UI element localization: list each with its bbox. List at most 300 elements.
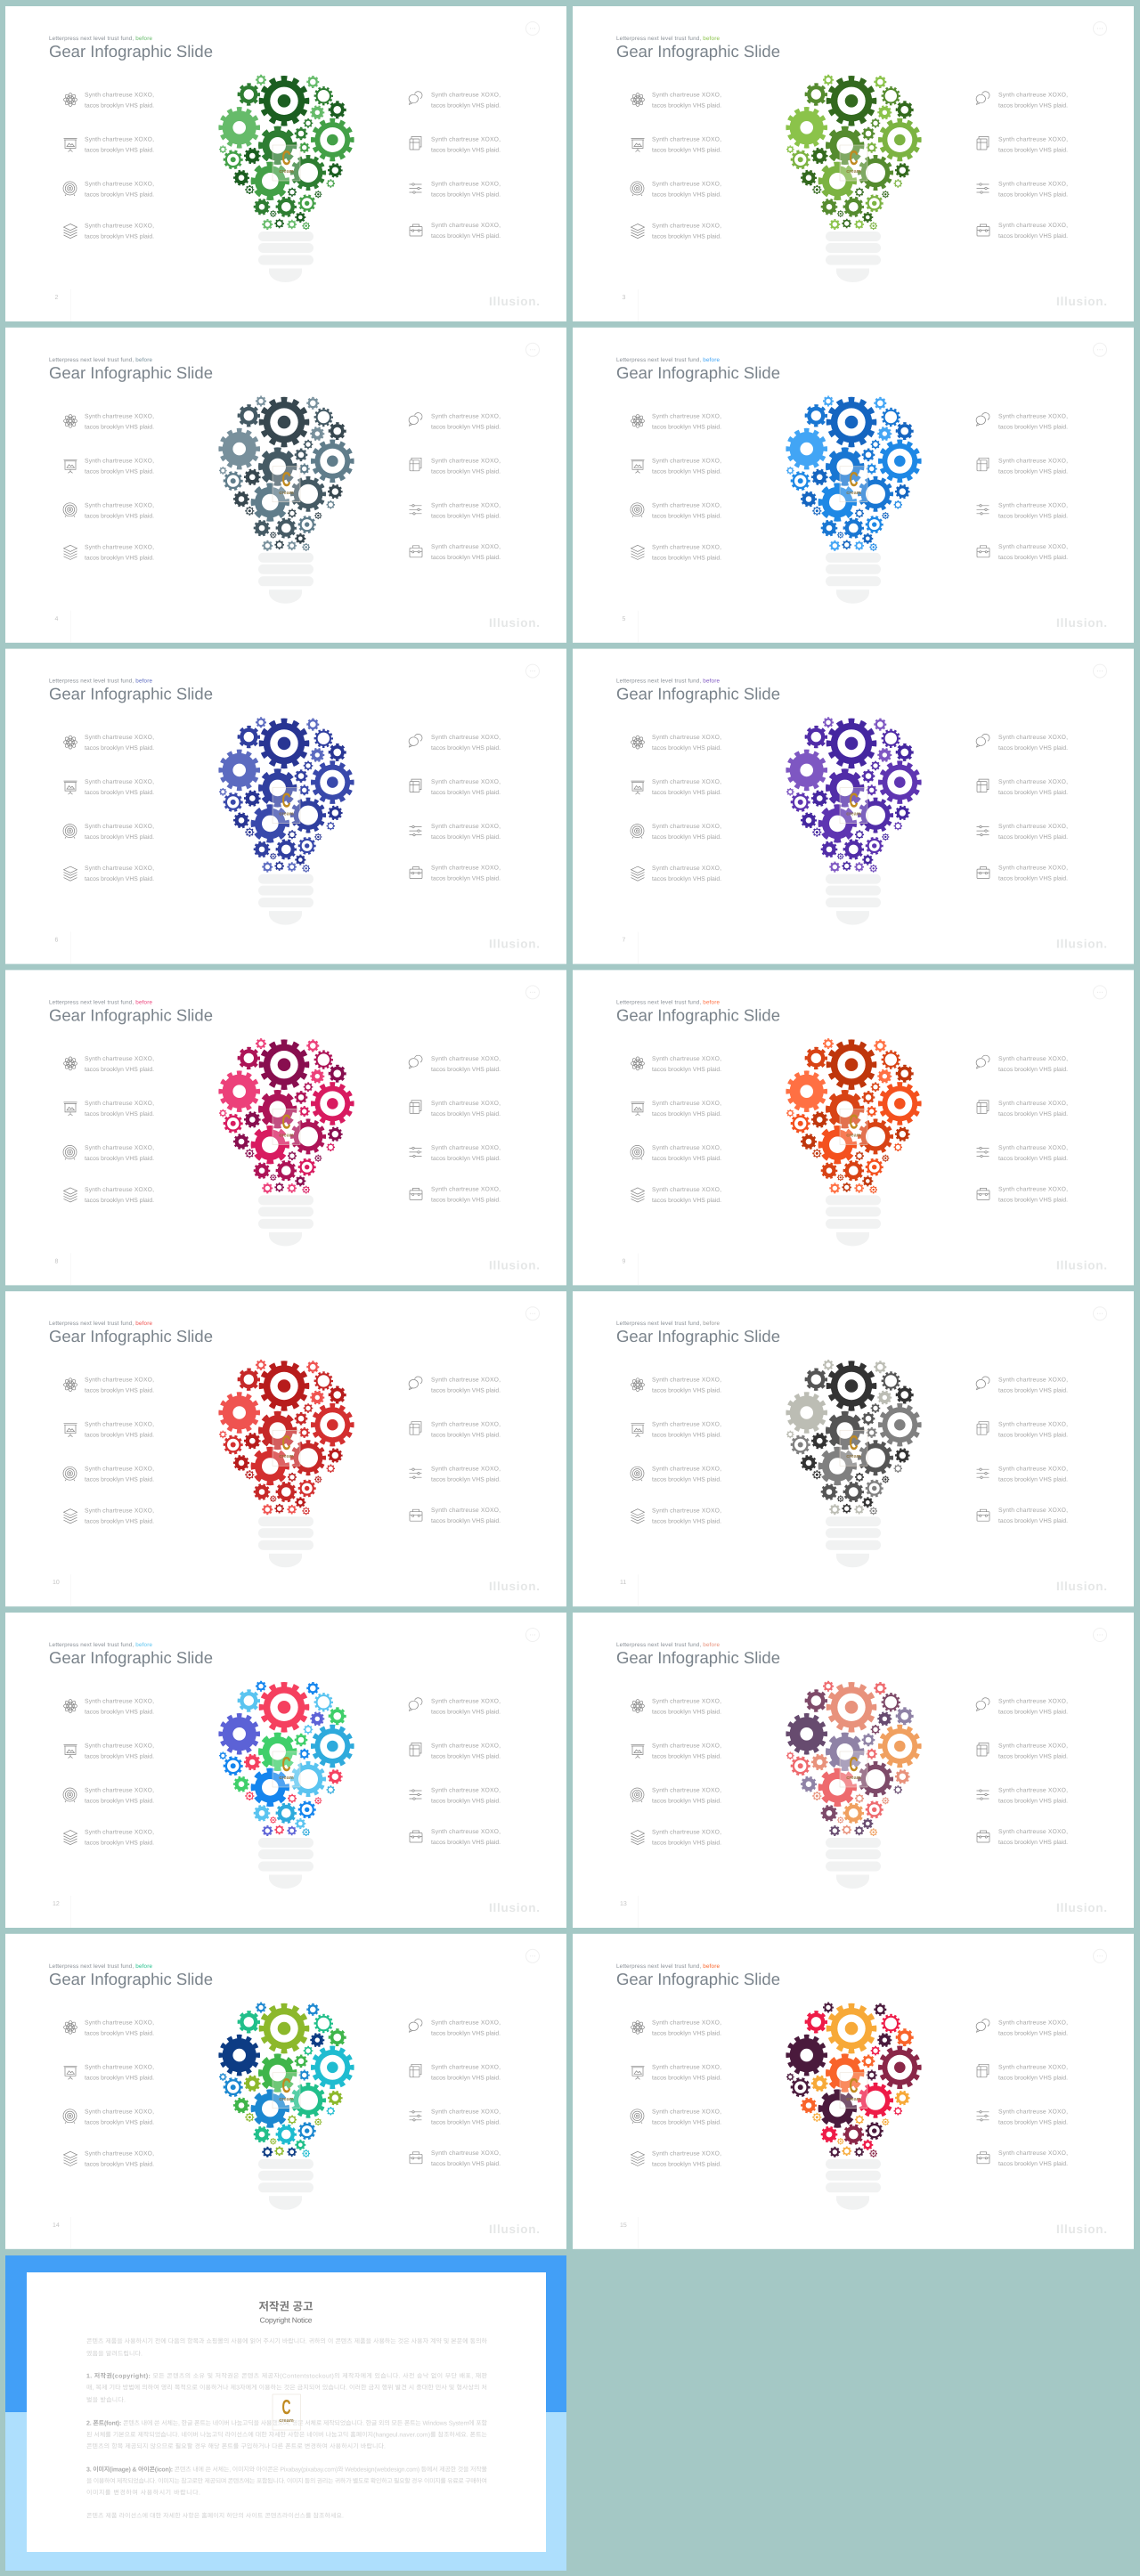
watermark xyxy=(840,1430,867,1466)
item 2: tacos brooklyn VHS plaid. xyxy=(652,1111,721,1117)
item 4: tacos brooklyn VHS plaid. xyxy=(85,2161,154,2167)
watermark: cream xyxy=(846,169,861,175)
item 2 xyxy=(64,779,154,796)
menu icon xyxy=(1094,986,1106,999)
item 6: tacos brooklyn VHS plaid. xyxy=(998,1111,1068,1117)
item 5 xyxy=(976,1377,1068,1394)
item 8: Synth chartreuse XOXO, xyxy=(998,1186,1068,1192)
item 8: Synth chartreuse XOXO, xyxy=(431,544,501,550)
footer divider xyxy=(69,1896,72,1928)
page number: 11 xyxy=(620,1580,626,1586)
item 4: tacos brooklyn VHS plaid. xyxy=(652,1519,721,1525)
item 6: tacos brooklyn VHS plaid. xyxy=(998,148,1068,153)
item 6: tacos brooklyn VHS plaid. xyxy=(431,1433,501,1439)
item 7 xyxy=(410,1467,501,1483)
footer divider xyxy=(637,2217,639,2249)
item 3: tacos brooklyn VHS plaid. xyxy=(85,1799,154,1804)
item 4: tacos brooklyn VHS plaid. xyxy=(85,1198,154,1204)
item 5: tacos brooklyn VHS plaid. xyxy=(431,424,501,430)
item 7: tacos brooklyn VHS plaid. xyxy=(998,834,1068,841)
item 5: tacos brooklyn VHS plaid. xyxy=(998,1710,1068,1715)
item 6: tacos brooklyn VHS plaid. xyxy=(431,790,501,796)
item 3: tacos brooklyn VHS plaid. xyxy=(652,2119,721,2125)
item 1: tacos brooklyn VHS plaid. xyxy=(652,1710,721,1715)
item 1: Synth chartreuse XOXO, xyxy=(652,735,721,741)
item 2: tacos brooklyn VHS plaid. xyxy=(85,1433,154,1439)
item 3 xyxy=(63,182,154,198)
logo: Illusion. xyxy=(1056,1580,1107,1593)
logo: Illusion. xyxy=(489,1580,540,1593)
watermark xyxy=(273,1109,300,1144)
item 5: tacos brooklyn VHS plaid. xyxy=(998,2030,1068,2036)
item 1 xyxy=(64,735,154,752)
watermark: cream xyxy=(846,1454,861,1459)
watermark: cream xyxy=(279,1133,294,1138)
page number: 7 xyxy=(622,938,625,944)
footer divider xyxy=(69,611,72,643)
item 7 xyxy=(976,2109,1068,2125)
item 6: tacos brooklyn VHS plaid. xyxy=(431,1111,501,1117)
paragraph 1: copyright xyxy=(86,2372,488,2404)
item 8 xyxy=(977,1186,1068,1203)
kicker: Letterpress next level trust fund, before xyxy=(49,679,152,685)
item 5 xyxy=(976,1698,1068,1715)
panel: slide 3 lime xyxy=(573,6,1134,321)
item 3 xyxy=(631,2109,721,2125)
item 3: Synth chartreuse XOXO, xyxy=(652,824,721,830)
item 2: Synth chartreuse XOXO, xyxy=(85,1743,154,1749)
item 1: tacos brooklyn VHS plaid. xyxy=(652,745,721,752)
item 8 xyxy=(977,865,1068,882)
item 5 xyxy=(409,413,501,430)
item 3 xyxy=(631,1788,721,1804)
item 4 xyxy=(64,865,154,882)
item 3: tacos brooklyn VHS plaid. xyxy=(652,192,721,198)
item 8: tacos brooklyn VHS plaid. xyxy=(998,1840,1068,1846)
item 4: tacos brooklyn VHS plaid. xyxy=(652,1840,721,1847)
item 6: tacos brooklyn VHS plaid. xyxy=(431,468,501,475)
item 2 xyxy=(631,458,721,475)
paragraph 1: copyright: 벌을 받습니다. xyxy=(86,2397,126,2404)
kicker: Letterpress next level trust fund, before xyxy=(616,1642,720,1648)
logo: Illusion. xyxy=(1056,938,1107,951)
item 7: tacos brooklyn VHS plaid. xyxy=(431,2119,501,2125)
item 2: Synth chartreuse XOXO, xyxy=(85,779,154,785)
item 5 xyxy=(976,413,1068,430)
item 2: Synth chartreuse XOXO, xyxy=(652,137,721,142)
item 1: tacos brooklyn VHS plaid. xyxy=(85,745,154,752)
item 5: Synth chartreuse XOXO, xyxy=(431,413,501,419)
item 1 xyxy=(631,735,721,752)
intro paragraph: 콘텐츠 제품을 사용하시기 전에 다음의 항목과 쇼핑몰의 사용에 읽어 주시기 바랍니다. 귀하의 이 콘텐츠 제품을 사용하는 것은 사용자 계약 및 본문에 동의하 xyxy=(86,2338,488,2345)
item 7: Synth chartreuse XOXO, xyxy=(998,182,1068,187)
item 2 xyxy=(631,1743,721,1759)
item 2: Synth chartreuse XOXO, xyxy=(652,779,721,785)
item 6: tacos brooklyn VHS plaid. xyxy=(998,1433,1068,1439)
item 4: tacos brooklyn VHS plaid. xyxy=(85,1840,154,1847)
item 8 xyxy=(410,2150,501,2167)
item 2: Synth chartreuse XOXO, xyxy=(652,2064,721,2070)
item 4: tacos brooklyn VHS plaid. xyxy=(652,1198,721,1204)
item 4 xyxy=(64,544,154,561)
watermark xyxy=(273,1751,300,1787)
kicker: Letterpress next level trust fund, before xyxy=(616,679,720,685)
item 5 xyxy=(409,92,501,109)
item 7 xyxy=(410,1145,501,1162)
item 5: tacos brooklyn VHS plaid. xyxy=(431,745,501,752)
item 4: Synth chartreuse XOXO, xyxy=(85,1829,154,1836)
watermark: C xyxy=(850,1109,859,1133)
page number: 9 xyxy=(622,1258,625,1264)
watermark xyxy=(273,788,300,824)
logo: Illusion. xyxy=(1056,295,1107,308)
item 2 xyxy=(64,2064,154,2081)
watermark: C xyxy=(281,1752,290,1776)
item 6: Synth chartreuse XOXO, xyxy=(431,1101,501,1107)
item 8: tacos brooklyn VHS plaid. xyxy=(998,1197,1068,1203)
item 3 xyxy=(631,1467,721,1483)
item 1: Synth chartreuse XOXO, xyxy=(85,2019,154,2026)
item 7 xyxy=(976,502,1068,519)
item 4 xyxy=(631,1508,721,1525)
watermark xyxy=(840,788,867,824)
item 8: tacos brooklyn VHS plaid. xyxy=(431,1518,501,1524)
item 7: tacos brooklyn VHS plaid. xyxy=(431,1156,501,1162)
item 7: tacos brooklyn VHS plaid. xyxy=(431,192,501,198)
item 7: Synth chartreuse XOXO, xyxy=(998,824,1068,830)
item 8: tacos brooklyn VHS plaid. xyxy=(431,2161,501,2167)
item 7: tacos brooklyn VHS plaid. xyxy=(998,1156,1068,1162)
item 5: tacos brooklyn VHS plaid. xyxy=(998,103,1068,109)
item 8: Synth chartreuse XOXO, xyxy=(431,865,501,872)
item 3: tacos brooklyn VHS plaid. xyxy=(652,513,721,519)
watermark: C xyxy=(281,1109,290,1133)
item 1 xyxy=(64,413,154,430)
item 2: tacos brooklyn VHS plaid. xyxy=(652,2075,721,2081)
item 1 xyxy=(631,1056,721,1073)
watermark: C xyxy=(850,1431,859,1454)
lightbulb made of gears xyxy=(786,718,919,925)
item 8 xyxy=(977,2150,1068,2167)
item 6 xyxy=(410,137,501,153)
item 2 xyxy=(64,1743,154,1759)
item 6: Synth chartreuse XOXO, xyxy=(431,458,501,464)
item 2 xyxy=(64,1422,154,1439)
item 1 xyxy=(64,1699,154,1715)
footer divider xyxy=(637,932,639,964)
item 7: Synth chartreuse XOXO, xyxy=(431,1145,501,1151)
item 7: Synth chartreuse XOXO, xyxy=(998,502,1068,508)
kicker: Letterpress next level trust fund, before xyxy=(616,357,720,363)
watermark: cream xyxy=(279,1454,294,1459)
watermark: cream xyxy=(846,491,861,496)
logo: Illusion. xyxy=(489,938,540,951)
item 1: tacos brooklyn VHS plaid. xyxy=(85,424,154,430)
item 1: Synth chartreuse XOXO, xyxy=(85,1699,154,1704)
lightbulb made of gears xyxy=(786,75,919,282)
watermark: C xyxy=(850,146,859,169)
menu icon xyxy=(525,21,540,36)
lightbulb made of gears xyxy=(786,2003,919,2210)
item 8 xyxy=(410,1829,501,1846)
item 5: Synth chartreuse XOXO, xyxy=(431,2019,501,2026)
menu icon xyxy=(525,1949,540,1962)
item 1: Synth chartreuse XOXO, xyxy=(652,1377,721,1384)
item 2 xyxy=(631,1101,721,1117)
item 1 xyxy=(631,2019,721,2036)
item 4: tacos brooklyn VHS plaid. xyxy=(85,1519,154,1525)
item 1: Synth chartreuse XOXO, xyxy=(85,735,154,741)
item 3 xyxy=(63,1467,154,1483)
item 1: Synth chartreuse XOXO, xyxy=(85,1056,154,1062)
item 6: tacos brooklyn VHS plaid. xyxy=(431,1754,501,1759)
item 1: Synth chartreuse XOXO, xyxy=(85,1377,154,1384)
footer divider xyxy=(69,2217,72,2249)
title: Gear Infographic Slide xyxy=(49,1648,213,1667)
item 2: tacos brooklyn VHS plaid. xyxy=(85,148,154,153)
item 2: tacos brooklyn VHS plaid. xyxy=(85,1754,154,1759)
panel: slide 4 slate xyxy=(5,328,566,643)
item 8: Synth chartreuse XOXO, xyxy=(431,1186,501,1192)
logo: Illusion. xyxy=(1056,2223,1107,2236)
item 4 xyxy=(631,2150,721,2167)
item 3: tacos brooklyn VHS plaid. xyxy=(85,834,154,841)
title: Gear Infographic Slide xyxy=(49,42,213,61)
item 4: Synth chartreuse XOXO, xyxy=(652,544,721,550)
item 4: tacos brooklyn VHS plaid. xyxy=(85,876,154,882)
item 2 xyxy=(631,137,721,153)
item 2: Synth chartreuse XOXO, xyxy=(652,1422,721,1428)
item 8 xyxy=(410,1186,501,1203)
item 7: Synth chartreuse XOXO, xyxy=(431,2109,501,2115)
watermark: cream xyxy=(846,1776,861,1781)
page number: 3 xyxy=(622,295,625,301)
item 6 xyxy=(977,458,1068,475)
item 3 xyxy=(63,502,154,519)
item 6 xyxy=(410,1743,501,1759)
item 7 xyxy=(410,2109,501,2125)
item 7: tacos brooklyn VHS plaid. xyxy=(998,192,1068,198)
item 7: tacos brooklyn VHS plaid. xyxy=(998,1477,1068,1483)
item 1: Synth chartreuse XOXO, xyxy=(652,413,721,419)
page number: 13 xyxy=(620,1901,627,1907)
item 6 xyxy=(977,1743,1068,1759)
watermark: C xyxy=(281,467,290,491)
footer divider xyxy=(637,1896,639,1928)
item 3: Synth chartreuse XOXO, xyxy=(652,2109,721,2115)
item 5 xyxy=(409,734,501,752)
item 3 xyxy=(631,182,721,198)
item 8 xyxy=(410,865,501,882)
paragraph 2: font: 된 서체를 기본으로 제작되었습니다. 네이버 나눔고딕 라이선스에 대한 자세한 사항은 네이버 나눔고딕 홈페이지(hangeul.naver.com)를 참조하세요. 폰트는 xyxy=(86,2431,488,2438)
item 7: tacos brooklyn VHS plaid. xyxy=(431,513,501,519)
item 5: tacos brooklyn VHS plaid. xyxy=(431,1388,501,1394)
paragraph 3: image and icon: 을 이용하여 제작되었습니다. 이미지는 참고로만 제공되며 콘텐츠에는 포함됩니다. 이미지 등의 권리는 귀하가 별도로 확인하고 필요할 경우 이미지를 유료로 구매하여 xyxy=(86,2477,487,2484)
item 7: Synth chartreuse XOXO, xyxy=(431,1788,501,1793)
item 4: Synth chartreuse XOXO, xyxy=(652,223,721,230)
watermark xyxy=(273,2073,300,2109)
item 3: Synth chartreuse XOXO, xyxy=(85,824,154,830)
item 2 xyxy=(631,1422,721,1439)
logo: Illusion. xyxy=(489,295,540,308)
item 8: Synth chartreuse XOXO, xyxy=(431,223,501,229)
title: Gear Infographic Slide xyxy=(49,1005,213,1024)
item 2: Synth chartreuse XOXO, xyxy=(85,458,154,464)
item 6: Synth chartreuse XOXO, xyxy=(998,1743,1068,1749)
watermark: C xyxy=(281,789,290,812)
item 8: Synth chartreuse XOXO, xyxy=(998,2150,1068,2157)
logo: Illusion. xyxy=(489,1901,540,1914)
kicker: Letterpress next level trust fund, before xyxy=(49,36,152,42)
item 6: Synth chartreuse XOXO, xyxy=(431,1743,501,1749)
watermark xyxy=(273,2394,301,2430)
watermark: C xyxy=(850,467,859,491)
item 6 xyxy=(977,1101,1068,1117)
watermark: cream xyxy=(846,812,861,817)
copyright heading: 저작권 공고 xyxy=(259,2301,313,2313)
item 4: Synth chartreuse XOXO, xyxy=(652,1829,721,1836)
item 5 xyxy=(976,1055,1068,1073)
item 5 xyxy=(976,2019,1068,2036)
item 5: tacos brooklyn VHS plaid. xyxy=(998,424,1068,430)
item 6 xyxy=(977,1422,1068,1439)
item 3: Synth chartreuse XOXO, xyxy=(85,502,154,508)
item 2: Synth chartreuse XOXO, xyxy=(85,1422,154,1428)
item 4: tacos brooklyn VHS plaid. xyxy=(652,233,721,240)
item 2 xyxy=(64,458,154,475)
item 7: tacos brooklyn VHS plaid. xyxy=(431,834,501,841)
panel: slide 12 bright multicolour xyxy=(5,1613,566,1928)
footer divider xyxy=(69,1574,72,1606)
menu icon xyxy=(1094,21,1106,36)
item 3: Synth chartreuse XOXO, xyxy=(652,182,721,187)
item 7: Synth chartreuse XOXO, xyxy=(998,1145,1068,1151)
item 8 xyxy=(410,544,501,561)
item 5: Synth chartreuse XOXO, xyxy=(998,1056,1068,1062)
item 5: tacos brooklyn VHS plaid. xyxy=(431,1710,501,1715)
item 8: Synth chartreuse XOXO, xyxy=(998,865,1068,872)
item 1 xyxy=(64,1377,154,1394)
logo: Illusion. xyxy=(489,616,540,630)
item 5: tacos brooklyn VHS plaid. xyxy=(998,745,1068,752)
item 7 xyxy=(976,182,1068,198)
item 2: Synth chartreuse XOXO, xyxy=(652,1743,721,1749)
item 3: tacos brooklyn VHS plaid. xyxy=(85,513,154,519)
item 6: Synth chartreuse XOXO, xyxy=(431,2064,501,2070)
item 1: tacos brooklyn VHS plaid. xyxy=(652,1388,721,1394)
item 2: Synth chartreuse XOXO, xyxy=(85,137,154,142)
lightbulb made of gears xyxy=(786,1361,919,1567)
item 7: tacos brooklyn VHS plaid. xyxy=(998,513,1068,519)
title: Gear Infographic Slide xyxy=(49,1327,213,1345)
item 6 xyxy=(410,2064,501,2081)
kicker: Letterpress next level trust fund, before xyxy=(616,999,720,1005)
item 1: Synth chartreuse XOXO, xyxy=(85,93,154,98)
item 7 xyxy=(976,1145,1068,1162)
item 4: Synth chartreuse XOXO, xyxy=(652,1187,721,1193)
item 1: tacos brooklyn VHS plaid. xyxy=(85,1067,154,1073)
logo: Illusion. xyxy=(1056,1901,1107,1914)
item 5: Synth chartreuse XOXO, xyxy=(998,93,1068,98)
item 2 xyxy=(631,779,721,796)
watermark: C xyxy=(281,2074,290,2097)
item 7: Synth chartreuse XOXO, xyxy=(998,2109,1068,2115)
item 5 xyxy=(976,734,1068,752)
logo: Illusion. xyxy=(1056,1258,1107,1272)
lightbulb made of gears xyxy=(219,1361,352,1567)
item 4 xyxy=(64,223,154,240)
title: Gear Infographic Slide xyxy=(616,685,780,703)
item 2 xyxy=(64,137,154,153)
item 8: Synth chartreuse XOXO, xyxy=(998,223,1068,229)
watermark: C xyxy=(850,2074,859,2097)
item 4: Synth chartreuse XOXO, xyxy=(85,544,154,550)
kicker: Letterpress next level trust fund, before xyxy=(49,357,152,363)
item 6: Synth chartreuse XOXO, xyxy=(998,137,1068,142)
item 1: tacos brooklyn VHS plaid. xyxy=(652,1067,721,1073)
title: Gear Infographic Slide xyxy=(616,42,780,61)
item 3: tacos brooklyn VHS plaid. xyxy=(85,192,154,198)
paragraph 2: font xyxy=(86,2420,488,2450)
paragraph 3: image and icon xyxy=(86,2466,488,2497)
title: Gear Infographic Slide xyxy=(616,1970,780,1988)
item 4: Synth chartreuse XOXO, xyxy=(652,865,721,872)
item 6: Synth chartreuse XOXO, xyxy=(998,1101,1068,1107)
page number: 6 xyxy=(55,938,59,944)
watermark xyxy=(840,145,867,181)
item 8 xyxy=(410,1507,501,1524)
page number: 8 xyxy=(55,1258,59,1264)
watermark: cream xyxy=(279,1776,294,1781)
item 8: tacos brooklyn VHS plaid. xyxy=(431,1197,501,1203)
item 1 xyxy=(631,1699,721,1715)
item 4 xyxy=(631,865,721,882)
item 7: tacos brooklyn VHS plaid. xyxy=(998,1799,1068,1804)
item 7 xyxy=(410,1788,501,1804)
kicker: Letterpress next level trust fund, before xyxy=(616,1963,720,1970)
item 2: tacos brooklyn VHS plaid. xyxy=(652,1433,721,1439)
watermark: cream xyxy=(846,2097,861,2102)
item 1: Synth chartreuse XOXO, xyxy=(85,413,154,419)
lightbulb made of gears xyxy=(219,75,352,282)
watermark: C xyxy=(850,1752,859,1776)
footer divider xyxy=(69,289,72,321)
item 5: Synth chartreuse XOXO, xyxy=(431,93,501,98)
item 5: Synth chartreuse XOXO, xyxy=(431,735,501,741)
item 5: Synth chartreuse XOXO, xyxy=(998,2019,1068,2026)
item 7: Synth chartreuse XOXO, xyxy=(431,1467,501,1473)
lightbulb made of gears xyxy=(786,396,919,604)
item 1 xyxy=(64,2019,154,2036)
item 7 xyxy=(410,182,501,198)
item 7 xyxy=(410,824,501,841)
item 6 xyxy=(410,779,501,796)
watermark xyxy=(273,145,300,181)
item 1 xyxy=(631,1377,721,1394)
title: Gear Infographic Slide xyxy=(616,1005,780,1024)
item 1: Synth chartreuse XOXO, xyxy=(652,1699,721,1704)
kicker: Letterpress next level trust fund, before xyxy=(49,1963,152,1970)
lightbulb made of gears xyxy=(786,1681,919,1889)
title: Gear Infographic Slide xyxy=(49,685,213,703)
paragraph 3: image and icon: 이미지를 변경하여 사용하시기 바랍니다. xyxy=(86,2490,200,2497)
item 2: tacos brooklyn VHS plaid. xyxy=(85,468,154,475)
item 3: Synth chartreuse XOXO, xyxy=(652,1145,721,1151)
page number: 4 xyxy=(55,616,59,622)
item 7 xyxy=(410,502,501,519)
item 1 xyxy=(631,413,721,430)
footer divider xyxy=(637,611,639,643)
